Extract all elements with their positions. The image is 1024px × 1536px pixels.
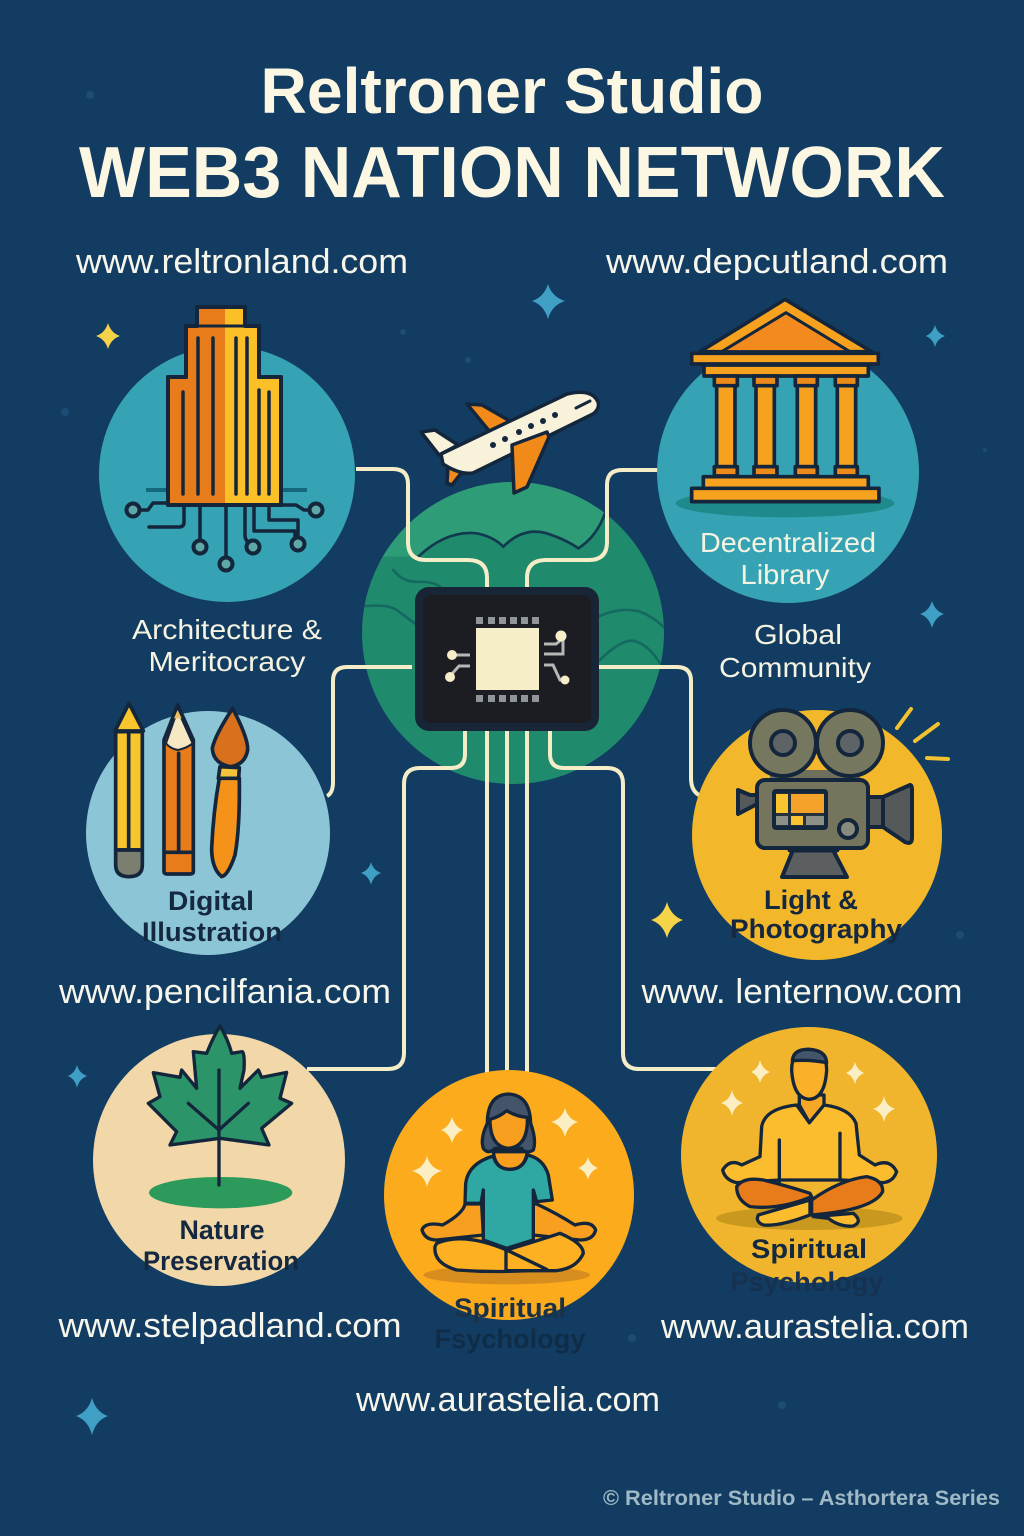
- panel: decentralized library: Library: [740, 559, 830, 590]
- panel: light and photography: Photography: [730, 914, 902, 944]
- panel: spiritual psychology: Spiritual: [751, 1234, 867, 1264]
- connectors: [307, 469, 716, 1078]
- icon: film camera: [738, 710, 912, 877]
- icon: pen: [164, 705, 193, 874]
- title: [79, 55, 945, 213]
- icon: brush: [212, 708, 248, 877]
- panel: decentralized library: Decentralized: [700, 527, 876, 558]
- icon: light rays: [897, 709, 948, 759]
- icon: skyscraper: [126, 307, 322, 570]
- panel: decentralized library: [657, 299, 919, 603]
- panel: nature preservation: [93, 1026, 345, 1286]
- icon: sparkles: [412, 1108, 598, 1187]
- label: global community: [719, 619, 871, 683]
- label: global community: Community: [719, 652, 871, 683]
- url: reltronland: www.reltronland.com: [75, 243, 408, 281]
- panel: digital illustration: Illustration: [142, 917, 282, 947]
- icon: maple leaf: [148, 1026, 292, 1208]
- label: architecture: Meritocracy: [148, 646, 306, 677]
- icon: woman meditating: [422, 1094, 596, 1284]
- star: blue top center: [532, 284, 565, 319]
- title: WEB3 NATION NETWORK: [79, 133, 945, 213]
- icon: airplane: [421, 392, 598, 493]
- panel: architecture: [99, 307, 355, 602]
- url: aurastelia right: www.aurastelia.com: [660, 1308, 969, 1346]
- star: blue bottom left: [76, 1398, 108, 1435]
- panel: digital illustration: Digital: [168, 886, 254, 916]
- label: architecture: [132, 614, 322, 677]
- star: gold top left: [96, 323, 120, 349]
- panel: spiritual fsychology: Spiritual: [454, 1293, 566, 1323]
- panel: globe: [362, 482, 664, 784]
- panel: spiritual fsychology: [384, 1070, 634, 1354]
- icon: central chip: [415, 587, 599, 731]
- star: gold center right: [651, 902, 683, 938]
- label: global community: Global: [754, 619, 842, 650]
- url: aurastelia bottom: www.aurastelia.com: [355, 1381, 660, 1419]
- star: blue right: [920, 601, 944, 628]
- star: blue lower left: [68, 1065, 87, 1088]
- icon: pencil: [115, 703, 143, 877]
- panel: spiritual fsychology: Fsychology: [434, 1324, 586, 1354]
- icon: sparkles: [721, 1060, 895, 1122]
- panel: nature preservation: Preservation: [143, 1246, 299, 1276]
- url: lenternow: www. lenternow.com: [640, 973, 962, 1011]
- title: Reltroner Studio: [260, 55, 764, 127]
- panel: light and photography: Light &: [764, 885, 858, 915]
- panel: spiritual psychology: [681, 1027, 937, 1297]
- footer credit: © Reltroner Studio – Asthortera Series: [603, 1487, 1000, 1510]
- panel: light and photography: [692, 709, 948, 960]
- url: stelpadland: www.stelpadland.com: [57, 1307, 401, 1345]
- star: blue top right: [926, 325, 945, 347]
- label: architecture: Architecture &: [132, 614, 322, 645]
- icon: temple: [676, 299, 894, 517]
- panel: spiritual psychology: Psychology: [730, 1267, 884, 1297]
- url: pencilfania: www.pencilfania.com: [58, 973, 391, 1011]
- panel: digital illustration: [86, 703, 330, 955]
- star: blue center left: [361, 862, 381, 885]
- panel: nature preservation: Nature: [180, 1215, 264, 1245]
- icon: man meditating: [716, 1049, 903, 1230]
- url: depcutland: www.depcutland.com: [605, 243, 948, 281]
